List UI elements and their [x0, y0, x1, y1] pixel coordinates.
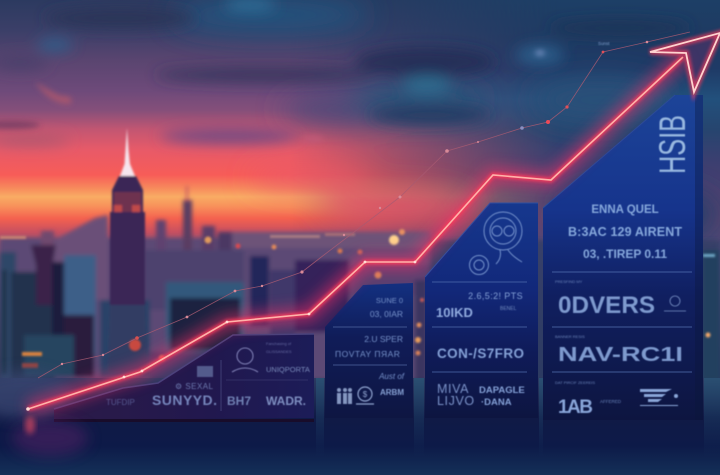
icon: coin seal: $	[363, 390, 368, 399]
label: vertical HSIB: HSIB	[652, 115, 693, 174]
label: sunyyd: SUNYYD.	[152, 392, 217, 408]
label: 2.6,5 stat: 2.6,5:2! PTS	[468, 291, 523, 301]
city bokeh lights	[0, 229, 715, 368]
label: block 2 heading: SUNE 0	[376, 296, 403, 305]
label: fine print line: GLISSANDES	[266, 349, 292, 354]
label: 10ikd: 10IKD	[436, 305, 473, 320]
label: airent line: B:3AC 129 AIRENT	[568, 225, 682, 239]
icon: people	[337, 388, 352, 404]
label: enna quel: ENNA QUEL	[591, 204, 659, 216]
blurred city skyline	[0, 186, 720, 380]
label: novtay: ПOVTAY ПЯAR	[335, 349, 400, 359]
floor reflection of line	[12, 416, 88, 456]
label: dotted line tag: Sunst	[598, 41, 610, 46]
icon: small seal	[664, 296, 686, 311]
label: small caption 1: PRESFIND MY	[555, 279, 583, 284]
label: nav-ric11: NAV-RC1I	[558, 344, 683, 366]
label: uniqports: UNIQPORTA	[266, 365, 310, 374]
label: 1ab: 1AB	[558, 397, 593, 418]
sky background	[0, 0, 720, 380]
label: fine print block: AFFERED	[600, 399, 622, 404]
thin dotted trend line	[38, 32, 690, 378]
glowing red growth line	[26, 57, 683, 411]
emblem: large globe seal	[470, 212, 522, 274]
arrowhead	[650, 33, 720, 92]
label: tufdip: TUFDIP	[106, 398, 135, 407]
label: fine print: Fanchasing of	[266, 341, 292, 346]
label: fine mark: BENEL	[500, 306, 517, 312]
label: small caption 2: BANNER RESIS	[555, 334, 585, 339]
label: wadr: WADR.	[266, 394, 306, 408]
label: block 2 value: 03, 0IAR	[370, 309, 403, 319]
label: dapagle: DAPAGLE	[479, 385, 525, 396]
icon: striped emblem	[640, 389, 678, 406]
label: odvers: 0DVERS	[558, 292, 655, 319]
label: miva: MIVA	[437, 382, 469, 396]
step block 1	[54, 334, 314, 422]
step block 3	[425, 203, 538, 418]
label: dana: ·DANA	[481, 397, 512, 408]
label: sexal: ⚙ SEXAL	[175, 382, 214, 391]
label: livo: LIJVO	[437, 394, 475, 408]
emblem: circular seal	[232, 348, 258, 372]
step block 4	[543, 95, 703, 420]
label: block 2 stat: 2.U SPER	[364, 334, 403, 344]
label: tirep line: 03, .TIREP 0.11	[583, 247, 667, 261]
floor reflective surface	[0, 371, 720, 475]
label: small caption 3: DAT PIRCIF ZEEREIS	[555, 380, 595, 385]
label: arom: ARBM	[380, 388, 404, 397]
label: bh7: BH7	[227, 394, 251, 408]
emblem: small badge	[197, 366, 213, 377]
label: cons-stfro: CON-/S7FRO	[437, 346, 524, 361]
label: aust: Aust of	[378, 372, 405, 381]
step block 2	[325, 283, 413, 418]
empire-style skyscraper	[108, 128, 147, 372]
